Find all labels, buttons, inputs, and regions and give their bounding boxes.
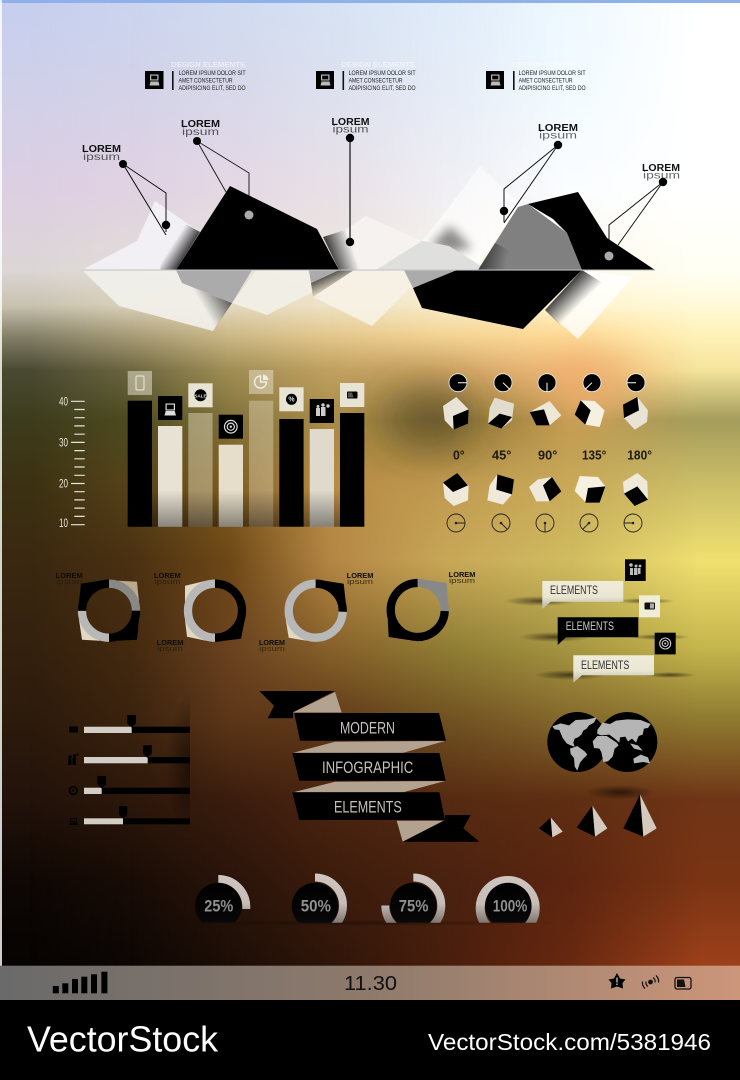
donut 3	[259, 573, 374, 653]
donut 4	[388, 572, 476, 640]
element tags	[504, 559, 696, 683]
icon: signal bars	[53, 972, 107, 993]
tag 1: ELEMENTS	[550, 585, 598, 597]
icon: star alert	[608, 973, 626, 988]
top cubes	[443, 397, 648, 430]
bars	[128, 401, 364, 527]
axis scale: 20	[59, 476, 68, 490]
large pyramid	[623, 794, 657, 837]
angle labels: 135°	[582, 448, 606, 462]
donut 2	[154, 573, 245, 653]
gauge 100: 100%	[493, 896, 527, 916]
icon: laptop	[158, 396, 182, 420]
gauge 25: 25%	[204, 896, 233, 916]
info item 3: DESIGN ELEMENTS	[512, 62, 586, 69]
tag 3	[534, 633, 696, 683]
callout 3: LOREM	[332, 117, 370, 128]
donut 4: ipsum	[449, 578, 475, 585]
info item 3: ADIPISICING ELIT, SED DO	[519, 86, 586, 92]
callout 5: ipsum	[643, 170, 680, 182]
icon: wireless	[642, 976, 659, 988]
callout 4: ipsum	[539, 130, 577, 142]
callout 2: LOREM	[181, 119, 220, 130]
footer	[0, 1000, 740, 1080]
callout 2: ipsum	[182, 126, 219, 138]
bar chart	[59, 370, 364, 530]
tag 2: ELEMENTS	[566, 621, 614, 633]
tag 2	[519, 595, 690, 645]
info item 2	[316, 62, 416, 92]
gauge 50: 50%	[301, 896, 331, 916]
band: elements: ELEMENTS	[334, 798, 402, 816]
donut 3: ipsum	[259, 646, 285, 653]
tag 3: ELEMENTS	[581, 660, 630, 672]
gauge 75	[385, 878, 441, 934]
header info items	[145, 62, 586, 92]
donut 2: ipsum	[154, 579, 181, 586]
top dials	[449, 374, 645, 392]
icon: phone	[128, 371, 152, 395]
reflected lower polygons	[82, 270, 633, 339]
slider 4	[69, 806, 190, 825]
callout 1: ipsum	[83, 151, 120, 163]
info item 1: ADIPISICING ELIT, SED DO	[179, 86, 246, 92]
bottom dials	[447, 514, 642, 532]
donut 1: ipsum	[56, 579, 82, 586]
donut 3: LOREM	[347, 573, 374, 580]
donut 2: LOREM	[154, 573, 181, 580]
donut 3: ipsum	[347, 579, 373, 586]
info item 2: ADIPISICING ELIT, SED DO	[349, 86, 416, 92]
angle labels: 180°	[627, 448, 652, 462]
info item 3	[486, 62, 586, 92]
bottom cubes	[443, 473, 648, 506]
info item 2: LOREM IPSUM DOLOR SIT	[349, 71, 416, 77]
angle labels	[453, 448, 652, 462]
donut 4: LOREM	[449, 572, 476, 579]
gauge 50	[292, 878, 343, 934]
info item 3: LOREM IPSUM DOLOR SIT	[519, 71, 586, 77]
progress gauges	[195, 874, 540, 925]
icon: battery	[340, 383, 364, 407]
callout 2	[181, 119, 249, 196]
polygon mountain chart	[82, 117, 680, 339]
donut 2: LOREM	[157, 640, 184, 647]
info item 2: DESIGN ELEMENTS	[341, 62, 415, 69]
donut 1	[56, 573, 139, 641]
donut 2: ipsum	[157, 646, 183, 653]
slider 1	[69, 715, 190, 733]
axis scale: 30	[59, 436, 68, 450]
band: elements	[292, 792, 445, 820]
callout 5	[609, 163, 680, 245]
rotation panel	[443, 374, 652, 532]
callout 1: LOREM	[82, 144, 121, 155]
band: infographic	[292, 753, 446, 781]
gauge 75: 75%	[399, 896, 428, 916]
ribbon banner	[259, 691, 479, 842]
band: modern	[294, 713, 446, 741]
tag 1	[504, 559, 675, 609]
icon: sale	[188, 383, 213, 407]
gauge 100	[480, 880, 535, 936]
gauge 25	[195, 879, 246, 929]
band: infographic: INFOGRAPHIC	[322, 758, 413, 777]
info item 1: LOREM IPSUM DOLOR SIT	[179, 71, 246, 77]
icon: pie	[249, 370, 273, 394]
icon: sale: SALE	[194, 393, 207, 398]
callout 3	[332, 117, 370, 246]
callout 4	[500, 123, 578, 223]
callout 1	[82, 144, 170, 235]
medium pyramid	[577, 806, 607, 837]
brand wordmark: VectorStock	[27, 1018, 219, 1060]
info item 1: AMET CONSECTETUR	[179, 78, 233, 84]
icon: percent	[279, 387, 304, 411]
donut 1: LOREM	[56, 573, 83, 580]
info item 1	[145, 62, 246, 92]
slider 2	[68, 745, 190, 765]
icon: target	[219, 415, 243, 439]
band: modern: MODERN	[340, 718, 395, 738]
image id: VectorStock.com/5381946	[428, 1029, 711, 1055]
slider 3	[70, 776, 190, 794]
angle labels: 45°	[492, 448, 511, 462]
callout 4: LOREM	[538, 123, 578, 134]
info item 3: AMET CONSECTETUR	[519, 78, 573, 84]
icon: percent: %	[288, 397, 295, 404]
small pyramid	[539, 817, 563, 837]
callout 3: ipsum	[332, 124, 369, 136]
world globes	[547, 712, 657, 772]
info item 2: AMET CONSECTETUR	[349, 78, 403, 84]
axis scale: 10	[59, 516, 68, 530]
axis scale	[59, 394, 85, 530]
angle labels: 0°	[453, 448, 465, 462]
icon: people	[310, 399, 334, 423]
status bar	[0, 966, 740, 1000]
angle labels: 90°	[538, 448, 557, 462]
callout 5: LOREM	[642, 163, 680, 174]
upper polygons	[82, 166, 655, 271]
pyramids	[539, 785, 657, 837]
donut 3: LOREM	[259, 640, 285, 647]
sliders	[68, 707, 190, 825]
ribbon tails and folds	[259, 691, 479, 842]
info item 1: DESIGN ELEMENTS	[171, 62, 245, 69]
icon: battery	[675, 978, 691, 989]
time: 11.30	[344, 973, 397, 995]
axis scale: 40	[59, 394, 68, 408]
